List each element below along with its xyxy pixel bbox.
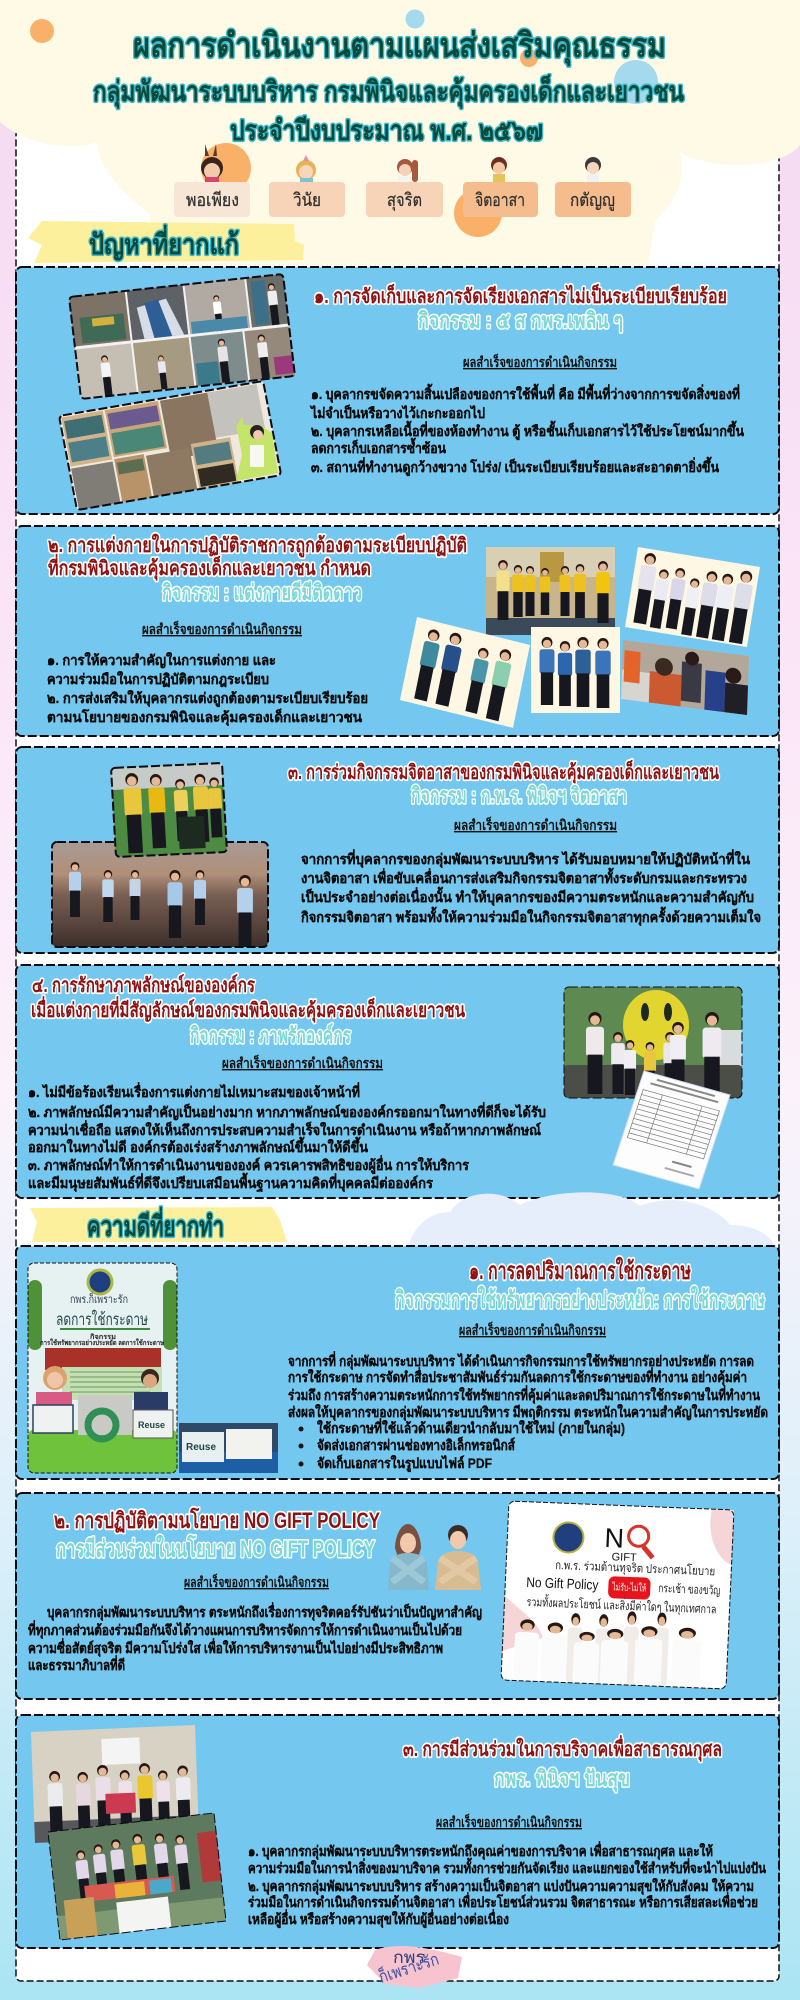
icon: woman crossing arms — [388, 1524, 429, 1590]
poster: no gift — [501, 1501, 734, 1689]
poster: reduce paper use — [28, 1263, 177, 1473]
photo: hall group — [486, 547, 615, 635]
panel 5 text: ผลสำเร็จของการดำเนินกิจกรรม — [459, 1321, 606, 1338]
photo: yellow shirts group — [111, 763, 227, 857]
panel 6 text: ที่ทุกภาคส่วนต้องร่วมมือกันจึงได้วางแผนการบริหารจัดการให้การดำเนินงานเป็นไปด้วย — [28, 1620, 462, 1639]
label กตัญญู — [555, 182, 631, 217]
panel 1 text: ๑. บุคลากรขจัดความสิ้นเปลืองของการใช้พื้นที่ คือ มีพื้นที่ว่างจากการขจัดสิ่งของที่ — [311, 383, 740, 403]
panel 6 text: การมีส่วนร่วมในนโยบาย NO GIFT POLICY — [56, 1534, 375, 1563]
poster: reduce paper use: กพร.ก็เพราะรัก — [70, 1292, 128, 1306]
panel 4 text — [28, 974, 546, 1193]
label สุจริต — [366, 182, 443, 217]
panel 3 text: กิจกรรมจิตอาสา พร้อมทั้งให้ความร่วมมือในกิจกรรมจิตอาสาทุกครั้งด้วยความเต็มใจ — [301, 906, 761, 926]
panel 6 text: ผลสำเร็จของการดำเนินกิจกรรม — [184, 1573, 329, 1590]
label จิตอาสา — [463, 182, 538, 217]
panel 1 text: กิจกรรม : ๕ ส กพร.เพลิน ๆ — [418, 308, 623, 333]
panel 1 text: ลดการเก็บเอกสารซ้ำซ้อน — [311, 437, 446, 456]
panel: 2 dress code — [16, 526, 779, 736]
icon: character boy brown — [491, 157, 507, 183]
panel 7 text: ผลสำเร็จของการดำเนินกิจกรรม — [436, 1813, 582, 1830]
header cream cloud — [0, 0, 800, 265]
label พอเพียง: พอเพียง — [186, 190, 239, 210]
decorative blue clouds — [408, 1192, 775, 1246]
poster: no gift: กระเช้า ของขวัญ — [658, 1581, 721, 1598]
panel 7 text: ๑. บุคลากรกลุ่มพัฒนาระบบบริหารตระหนักถึงคุณค่าของการบริจาค เพื่อสาธารณกุศล และให้ — [248, 1841, 713, 1860]
panel 3 text: เป็นประจำอย่างต่อเนื่องนั้น ทำให้บุคลากรของมีความตระหนักและความสำคัญกับ — [301, 886, 754, 906]
panel 2 text: ความร่วมมือในการปฏิบัติตามกฎระเบียบ — [47, 670, 269, 688]
footer logo: กพร — [393, 1948, 425, 1967]
photo: reuse boxes: Reuse — [186, 1442, 216, 1453]
panel 7 text: ๓. การมีส่วนร่วมในการบริจาคเพื่อสาธารณกุศล — [403, 1734, 722, 1762]
panel 6 text: บุคลากรกลุ่มพัฒนาระบบบริหาร ตระหนักถึงเรื่องการทุจริตคอร์รัปชันว่าเป็นปัญหาสำคัญ — [47, 1602, 482, 1621]
panel 4 text: ๓. ภาพลักษณ์ทำให้การดำเนินงานขององค์ ควรเคารพสิทธิของผู้อื่น การให้บริการ — [28, 1155, 469, 1174]
label จิตอาสา: จิตอาสา — [475, 190, 525, 210]
panel 7 text: กพร. พินิจฯ ปันสุข — [494, 1766, 630, 1793]
label พอเพียง — [174, 182, 250, 217]
poster: no gift: N — [604, 1523, 625, 1554]
photo collage: cleaning — [69, 274, 295, 400]
heading: problems — [28, 221, 304, 263]
photo: two couples — [400, 617, 530, 728]
panel 1 text — [309, 283, 744, 476]
panel 6 text: ๒. การปฏิบัติตามนโยบาย NO GIFT POLICY — [54, 1507, 380, 1533]
panel 4 text: และมีมนุษยสัมพันธ์ที่ดีจึงเปรียบเสมือนพื้นฐานความคิดที่บุคคลมีต่อองค์กร — [28, 1172, 433, 1193]
panel 2 text: ๒. การแต่งกายในการปฏิบัติราชการถูกต้องตามระเบียบปฏิบัติ — [48, 533, 467, 559]
panel 3 text: จากการที่บุคลากรของกลุ่มพัฒนาระบบบริหาร ได้รับมอบหมายให้ปฏิบัติหน้าที่ใน — [301, 849, 750, 868]
panel 1 text: ๓. สถานที่ทำงานดูกว้างขวาง โปร่ง/ เป็นระเบียบเรียบร้อยและสะอาดตายิ่งขึ้น — [311, 456, 719, 476]
photo collage: tidy shelves — [59, 381, 281, 510]
icon: man crossing arms — [435, 1525, 481, 1590]
panel 2 text: ผลสำเร็จของการดำเนินกิจกรรม — [142, 620, 302, 637]
title — [93, 27, 684, 146]
panel: 6 no gift policy — [16, 1493, 779, 1699]
panel 2 text: ๑. การให้ความสำคัญในการแต่งกาย และ — [47, 651, 276, 669]
poster: no gift: No Gift Policy — [526, 1574, 599, 1593]
panel 5 text: จัดส่งเอกสารผ่านช่องทางอิเล็กทรอนิกส์ — [317, 1436, 515, 1453]
heading: virtues — [30, 1192, 775, 1246]
panel 1 text: ไม่จำเป็นหรือวางไว้เกะกะออกไป — [309, 404, 485, 421]
poster: reduce paper use: กิจกรรม — [89, 1333, 116, 1341]
heading: problems: ปัญหาที่ยากแก้ — [89, 224, 239, 261]
document: attendance sheet — [613, 1071, 730, 1189]
icon: woman in green jacket — [236, 416, 278, 481]
panel 2 text: ตามนโยบายของกรมพินิจและคุ้มครองเด็กและเยาวชน — [47, 708, 362, 726]
panel 3 text — [288, 759, 761, 926]
panel 4 text: ความน่าเชื่อถือ แสดงให้เห็นถึงการประสบความสำเร็จในการดำเนินงาน หรือถ้าหากภาพลักษณ์ — [28, 1120, 541, 1138]
panel 3 text: ผลสำเร็จของการดำเนินกิจกรรม — [454, 816, 617, 833]
panel: 5 paper reduction — [16, 1246, 779, 1479]
photo: four staff in blue — [531, 627, 620, 713]
panel 7 text: เหลือผู้อื่น หรือสร้างความสุขให้กับผู้อื่นอย่างต่อเนื่อง — [248, 1909, 509, 1928]
poster: no gift: รวมทั้งผลประโยชน์ และสิ่งมีค่าใดๆ ในทุกเทศกาล — [526, 1593, 717, 1617]
photo: meeting — [621, 640, 749, 715]
panel 2 text: กิจกรรม : แต่งกายดีมีติดดาว — [162, 580, 362, 605]
panel: 3 volunteering — [16, 747, 779, 953]
panel 3 text: กิจกรรม : ก.พ.ร. พินิจฯ จิตอาสา — [411, 783, 627, 808]
poster: reduce paper use: การใช้ทรัพยากรอย่างประหยัด ลดการใช้กระดาษ — [40, 1338, 164, 1347]
panel 6 text — [28, 1507, 482, 1673]
photo: donation office group — [31, 1725, 199, 1843]
panel 2 text — [47, 533, 467, 726]
photo: group at smiley statue — [564, 987, 742, 1098]
panel 4 text: ออกมาในทางไม่ดี องค์กรต้องเร่งสร้างภาพลักษณ์ขึ้นมาให้ดีขึ้น — [28, 1136, 368, 1155]
panel 6 text: และธรรมาภิบาลที่ดี — [28, 1655, 125, 1673]
label สุจริต: สุจริต — [387, 190, 422, 211]
panel: 7 donations — [16, 1715, 779, 1948]
icon: character girl — [201, 144, 223, 183]
icon: character ponytail — [397, 159, 418, 183]
panel 4 text: เมื่อแต่งกายที่มีสัญลักษณ์ของกรมพินิจและคุ้มครองเด็กและเยาวชน — [31, 995, 465, 1023]
panel 6 text: ความซื่อสัตย์สุจริต มีความโปร่งใส เพื่อให้การบริหารงานเป็นไปอย่างมีประสิทธิภาพ — [28, 1638, 443, 1657]
panel 4 text: ๔. การรักษาภาพลักษณ์ขององค์กร — [32, 974, 255, 997]
icon: character blonde — [296, 155, 316, 183]
label วินัย: วินัย — [293, 190, 321, 210]
panel 5 text: ๑. การลดปริมาณการใช้กระดาษ — [469, 1256, 691, 1285]
panel: 1 documents — [16, 267, 779, 514]
panel 3 text: งานจิตอาสา เพื่อขับเคลื่อนการส่งเสริมกิจกรรมจิตอาสาทั้งระดับกรมและกระทรวง — [301, 867, 747, 886]
poster: no gift: ก.พ.ร. ร่วมต้านทุจริต ประกาศนโยบาย — [555, 1558, 716, 1579]
panel 4 text: ผลสำเร็จของการดำเนินกิจกรรม — [222, 1054, 383, 1071]
panel 4 text: ๑. ไม่มีข้อร้องเรียนเรื่องการแต่งกายไม่เหมาะสมของเจ้าหน้าที่ — [28, 1082, 360, 1100]
footer logo: ก็เพราะรัก — [376, 1948, 441, 1987]
panel 4 text: ๒. ภาพลักษณ์มีความสำคัญเป็นอย่างมาก หากภาพลักษณ์ขององค์กรออกมาในทางที่ดีก็จะได้รับ — [28, 1102, 546, 1121]
photo: uniform group seated — [625, 547, 760, 647]
decorative circles — [30, 10, 658, 237]
panel 2 text: ที่กรมพินิจและคุ้มครองเด็กและเยาวชน กำหนด — [48, 553, 371, 581]
heading: virtues: ความดีที่ยากทำ — [87, 1206, 224, 1242]
photo: beach clean up — [52, 842, 268, 947]
virtue characters and labels — [174, 144, 631, 217]
poster: no gift: GIFT — [611, 1551, 637, 1564]
panel 1 text: ๒. บุคลากรเหลือเนื้อที่ของห้องทำงาน ตู้ หรือชั้นเก็บเอกสารไว้ใช้ประโยชน์มากขึ้น — [311, 420, 744, 440]
poster: no gift: ไม่รับ-ไม่ให้ — [611, 1581, 647, 1595]
icon: character boy dark — [585, 157, 601, 183]
panel 5 text: ใช้กระดาษที่ใช้แล้วด้านเดียวนำกลับมาใช้ใหม่ (ภายในกลุ่ม) — [317, 1418, 625, 1437]
photo: donation outdoor group — [48, 1813, 226, 1940]
panel 7 text — [248, 1734, 766, 1928]
panel: 4 image — [16, 965, 779, 1198]
label กตัญญู: กตัญญู — [570, 190, 615, 211]
title: ผลการดำเนินงานตามแผนส่งเสริมคุณธรรม — [133, 27, 666, 67]
panel 5 text — [288, 1256, 768, 1472]
panel 2 text: ๒. การส่งเสริมให้บุคลากรแต่งถูกต้องตามระเบียบเรียบร้อย — [47, 689, 368, 707]
panel 5 text: จัดเก็บเอกสารในรูปแบบไฟล์ PDF — [317, 1454, 492, 1472]
title: ประจำปีงบประมาณ พ.ศ. ๒๕๖๗ — [230, 115, 543, 146]
panel 1 text: ผลสำเร็จของการดำเนินกิจกรรม — [463, 353, 617, 370]
photo: reuse boxes — [179, 1423, 278, 1473]
poster: reduce paper use: ลดการใช้กระดาษ — [56, 1309, 148, 1329]
poster: reduce paper use: Reuse — [138, 1420, 165, 1430]
panel 4 text: กิจกรรม : ภาพรักองค์กร — [190, 1023, 351, 1048]
label วินัย — [269, 182, 345, 217]
